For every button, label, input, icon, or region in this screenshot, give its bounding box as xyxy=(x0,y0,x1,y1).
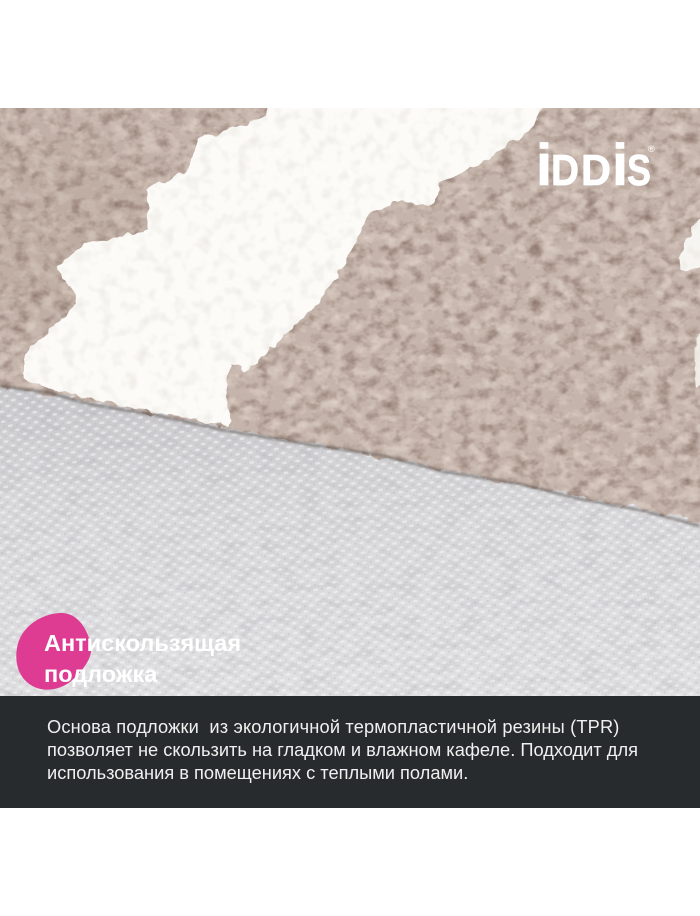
logo: IDDIS: D xyxy=(551,146,579,195)
fabric backing xyxy=(0,380,700,696)
shadow line under the mat xyxy=(0,386,700,526)
logo: IDDIS: i xyxy=(612,133,628,198)
text band xyxy=(0,696,700,808)
pink blob behind heading xyxy=(16,613,91,690)
photo: bath mat close-up xyxy=(0,108,700,696)
logo: IDDIS: ® xyxy=(648,144,655,154)
logo: IDDIS: S xyxy=(627,146,651,195)
logo: IDDIS: i xyxy=(536,133,552,198)
white pile stripe xyxy=(23,100,700,426)
logo: IDDIS: D xyxy=(581,146,611,195)
heading: Антискользящая подложка xyxy=(44,630,241,687)
description text: Основа подложки из экологичной термопластичной резины (TPR) позволяет не скользить на гладком и влажном кафеле. Подходит для использования в помещениях с теплыми полами. xyxy=(47,716,638,783)
beige pile of the mat xyxy=(0,100,700,527)
logo: IDDIS xyxy=(536,133,655,198)
